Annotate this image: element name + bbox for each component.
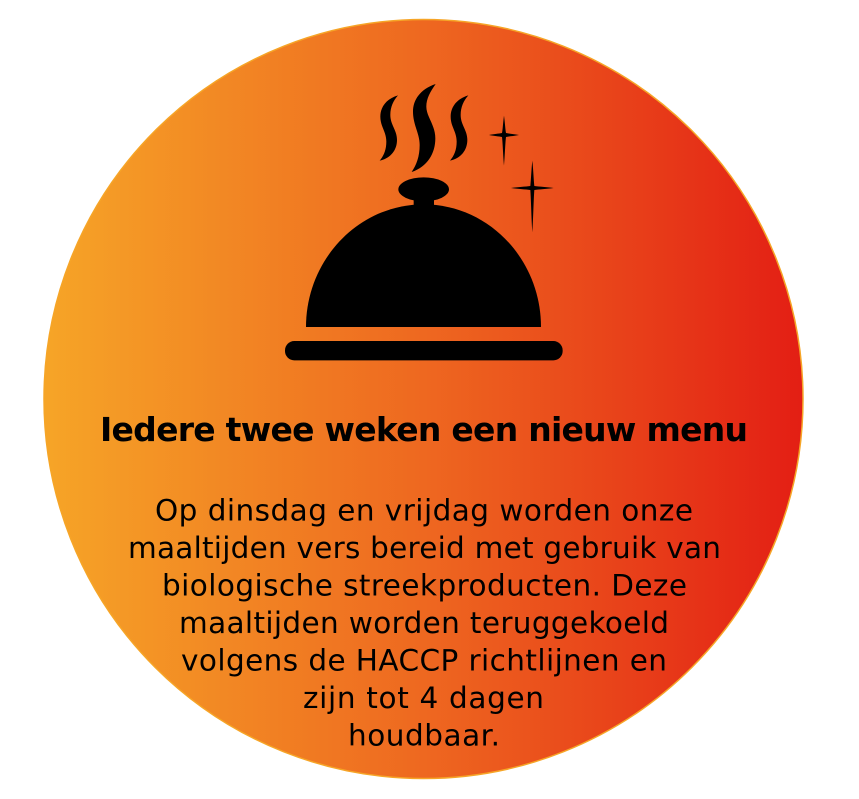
heading: Iedere twee weken een nieuw menu (100, 410, 748, 449)
icon: cloche knob (398, 177, 449, 208)
text block: description: houdbaar. (348, 718, 500, 752)
text block: description: volgens de HACCP richtlijnen en (181, 644, 667, 678)
icon: right steam (450, 95, 468, 161)
text block: description (128, 494, 721, 752)
icon: cloche dome (306, 204, 541, 327)
text block: description: biologische streekproducten. Deze (162, 568, 687, 602)
text block: description: zijn tot 4 dagen (303, 681, 544, 715)
icon: serving cloche with steam and sparkles (285, 84, 563, 360)
icon: serving plate (285, 341, 563, 360)
text block: description: maaltijden vers bereid met gebruik van (128, 531, 721, 565)
icon: left steam (380, 95, 398, 161)
icon: large sparkle (511, 161, 554, 232)
text block: description: maaltijden worden teruggekoeld (179, 606, 669, 640)
icon: middle steam (412, 84, 436, 172)
icon: small sparkle (489, 116, 519, 166)
text block: description: Op dinsdag en vrijdag worden onze (155, 494, 693, 528)
